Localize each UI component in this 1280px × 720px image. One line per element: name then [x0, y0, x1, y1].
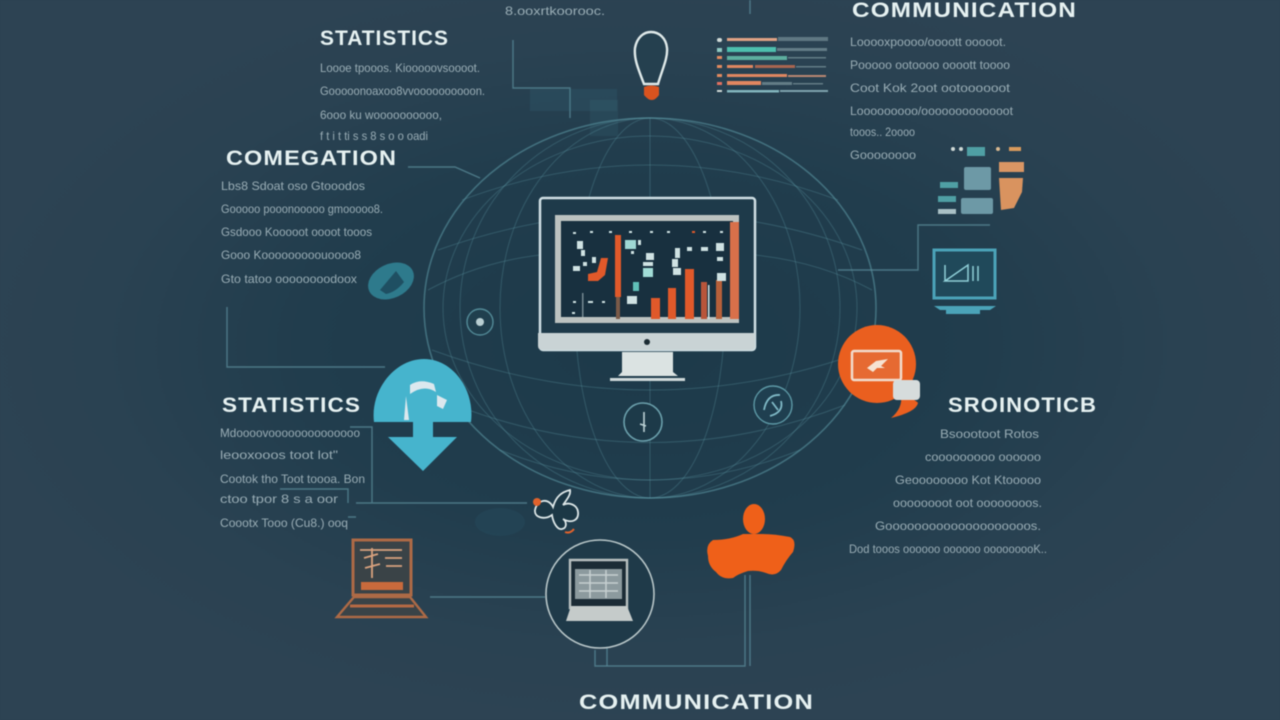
panel: comegation left: Gsdooo Kooooot oooot tooos — [221, 225, 372, 239]
panel: comegation left: Gooo Kooooooooouoooo8 — [221, 248, 361, 262]
panel: statistics lower left — [220, 394, 365, 530]
icon: dashboard widgets — [938, 147, 1024, 214]
heading: top cut-off caption: 8.ooxrtkoorooc. — [505, 4, 605, 18]
panel: sroinotics right: Bsoootoot Rotos — [940, 427, 1039, 441]
panel: comegation left: COMEGATION — [226, 147, 397, 170]
panel: statistics lower left: STATISTICS — [222, 394, 361, 417]
panel: comegation left — [221, 147, 397, 286]
panel: comegation left: Gto tatoo oooooooodoox — [221, 272, 357, 286]
panel: communication top right: Pooooo ootoooo oooott toooo — [850, 58, 1010, 72]
panel: statistics lower left: leooxooos toot lot" — [220, 448, 338, 462]
panel: statistics top left — [320, 27, 485, 143]
panel: sroinotics right: Dod tooos oooooo oooooo ooooooooK.. — [849, 542, 1047, 556]
panel: statistics top left: STATISTICS — [320, 27, 449, 50]
panel: communication top right: tooos.. 2oooo — [850, 125, 915, 139]
panel: statistics lower left: Cootok tho Toot toooa. Bon — [220, 472, 365, 486]
icon: brain node — [754, 386, 792, 424]
globe wireframe — [424, 100, 876, 536]
orange bar chart — [588, 235, 722, 319]
icon: orange chat bubble — [838, 325, 920, 418]
central monitor — [538, 198, 755, 381]
panel: statistics top left: Loooe tpooos. Kiooooovsoooot. — [320, 61, 480, 75]
panel: statistics top left: f t i t ti s s 8 s o o oadi — [320, 129, 428, 143]
panel: statistics lower left: Mdoooovoooooooooooooo — [220, 426, 360, 440]
panel: statistics top left: Gooooonoaxoo8vvoooooooooon. — [320, 84, 485, 98]
panel: communication top right: Coot Kok 2oot ootoooooot — [850, 81, 1011, 95]
bar list chart — [717, 37, 828, 92]
panel: sroinotics right: Goooooooooooooooooooos. — [875, 519, 1041, 533]
icon: teal globe blob — [362, 255, 420, 307]
panel: sroinotics right: oooooooot oot oooooooos. — [893, 496, 1042, 510]
panel: sroinotics right: SROINOTICB — [948, 394, 1097, 417]
panel: statistics lower left: Coootx Tooo (Cu8.) ooq — [220, 516, 348, 530]
panel: communication top right: Looooxpoooo/oooott ooooot. — [850, 35, 1006, 49]
icon: compass node — [624, 403, 662, 441]
heading: communication bottom: COMMUNICATION — [579, 691, 814, 714]
icon: small globe node left — [467, 309, 493, 335]
panel: comegation left: Gooooo pooonooooo gmooooo8. — [221, 202, 383, 216]
icon: light bulb — [635, 32, 667, 100]
icon: orange person blob — [707, 504, 794, 578]
icon: teal speech head arrow — [374, 359, 471, 471]
panel: sroinotics right — [849, 394, 1097, 556]
screen — [558, 218, 739, 320]
icon: circled laptop — [546, 540, 654, 648]
panel: communication top right — [850, 0, 1077, 162]
icon: orange laptop — [337, 540, 426, 617]
panel: communication top right: Goooooooo — [850, 148, 916, 162]
icon: clover outline — [533, 490, 578, 533]
icon: teal monitor — [934, 250, 996, 314]
panel: communication top right: Looooooooo/ooooooooooooot — [850, 104, 1014, 118]
monitor frame — [538, 198, 755, 381]
connector lines — [227, 0, 990, 666]
panel: statistics lower left: ctoo tpor 8 s a oor — [220, 492, 338, 506]
panel: sroinotics right: Geoooooooo Kot Ktooooo — [895, 473, 1041, 487]
panel: comegation left: Lbs8 Sdoat oso Gtooodos — [221, 179, 365, 193]
panel: statistics top left: 6ooo ku woooooooooo, — [320, 108, 442, 122]
panel: sroinotics right: cooooooooo oooooo — [925, 450, 1041, 464]
screen scatter marks — [572, 231, 726, 319]
